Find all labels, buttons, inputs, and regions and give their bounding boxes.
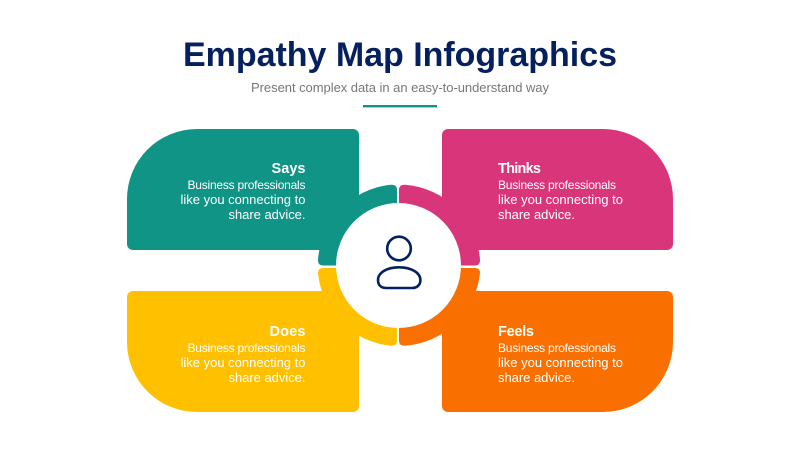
does ring segment	[318, 268, 397, 346]
feels body text: like you connecting to	[498, 355, 623, 370]
says body text: share advice.	[228, 207, 306, 222]
says ring segment	[318, 185, 397, 266]
does card shape	[127, 291, 359, 412]
thinks card shape	[442, 129, 673, 250]
thinks body text: Business professionals	[498, 178, 616, 192]
thinks ring segment	[399, 185, 480, 266]
says body text: Business professionals	[188, 178, 306, 192]
panel: says	[127, 129, 397, 266]
does heading: Does	[270, 324, 306, 340]
title underline	[363, 105, 437, 107]
panel: does	[127, 268, 397, 412]
panel: thinks	[399, 129, 673, 266]
center white circle	[336, 203, 461, 328]
subtitle: Present complex data in an easy-to-understand way	[251, 80, 550, 95]
icon body	[378, 267, 420, 288]
icon head	[387, 237, 411, 260]
thinks body text	[498, 178, 623, 222]
does body text: Business professionals	[188, 341, 306, 355]
does body text: share advice.	[228, 370, 306, 385]
says body text: like you connecting to	[180, 192, 306, 207]
feels ring segment	[399, 268, 480, 346]
says body text	[180, 178, 306, 222]
feels heading: Feels	[498, 324, 534, 340]
does body text: like you connecting to	[180, 355, 306, 370]
thinks body text: like you connecting to	[498, 192, 623, 207]
feels body text	[498, 341, 623, 385]
icon: person	[378, 237, 420, 288]
says card shape	[127, 129, 359, 250]
title: Empathy Map Infographics	[183, 36, 617, 74]
thinks heading: Thinks	[498, 161, 541, 177]
thinks body text: share advice.	[498, 207, 575, 222]
does body text	[180, 341, 306, 385]
feels body text: Business professionals	[498, 341, 616, 355]
says heading: Says	[272, 161, 306, 177]
panel: feels	[399, 268, 673, 412]
feels body text: share advice.	[498, 370, 575, 385]
feels card shape	[442, 291, 673, 412]
